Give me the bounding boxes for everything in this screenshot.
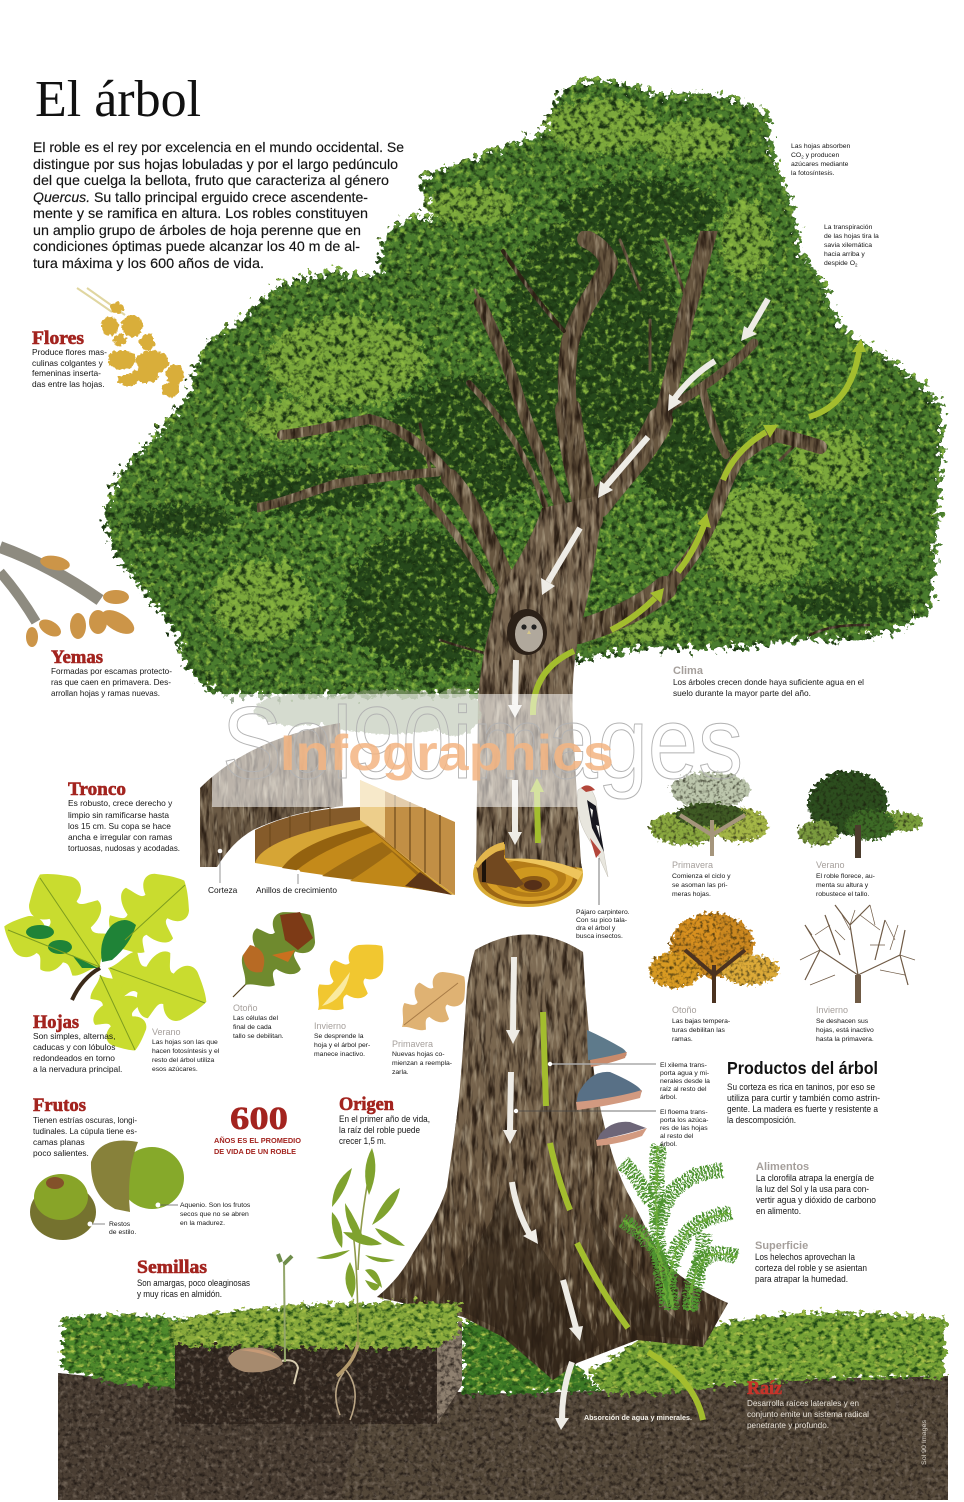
section: Origen: Origen <box>339 1094 394 1115</box>
section: Clima: Clima <box>673 665 704 677</box>
labels: bark and growth rings <box>208 849 337 895</box>
intro text: El roble es el rey por excelencia en el mundo occidental. Se <box>33 140 404 155</box>
leaf text: primavera: mienzan a reempla- <box>392 1060 452 1067</box>
text: floema: porta los azúca- <box>660 1117 708 1124</box>
illustration: catkin flowers <box>77 288 184 397</box>
intro text <box>33 140 404 271</box>
season text: verano tree: robustece el tallo. <box>816 891 869 898</box>
section: Tronco: limpio sin ramificarse hasta <box>68 810 169 820</box>
season text: invierno tree: Invierno <box>816 1005 848 1015</box>
text: xilema <box>660 1062 710 1101</box>
text: xilema: El xilema trans- <box>660 1062 707 1069</box>
section: Flores: femeninas inserta- <box>32 368 101 378</box>
section: Tronco <box>68 779 180 853</box>
section: Superficie: Los helechos aprovechan la <box>755 1252 855 1262</box>
illustration: bracket fungi <box>576 1030 647 1146</box>
season text: verano tree <box>816 860 875 898</box>
section: Tronco: tortuosas, nudosas y acodadas. <box>68 843 180 853</box>
leaf text: verano <box>152 1027 220 1073</box>
acorn labels: de estilo. <box>109 1229 136 1236</box>
section: Tronco: los 15 cm. Su copa se hace <box>68 821 171 831</box>
section: Tronco: ancha e irregular con ramas <box>68 832 172 842</box>
leaf text: invierno: Se desprende la <box>314 1033 364 1040</box>
section: Flores: Produce flores mas- <box>32 347 107 357</box>
leaf text: invierno <box>314 1021 370 1058</box>
section: Tronco: Es robusto, crece derecho y <box>68 798 173 808</box>
text block: leaves absorb CO2 <box>791 143 851 177</box>
text block: transpiration: despide O <box>824 260 855 267</box>
section: Yemas: Yemas <box>51 647 103 668</box>
season text: primavera tree: se asoman las pri- <box>672 882 728 889</box>
section: Semillas: Semillas <box>137 1257 207 1278</box>
text block: transpiration <box>824 224 879 268</box>
woodpecker text: Pájaro carpintero. <box>576 909 630 916</box>
leaf text: verano: Las hojas son las que <box>152 1039 218 1046</box>
season text: otoño tree: Las bajas tempera- <box>672 1018 730 1025</box>
credit: Sol 90 Images <box>921 1419 928 1465</box>
icon: sprouting acorn <box>228 1347 298 1384</box>
section: Origen: En el primer año de vida, <box>339 1114 430 1124</box>
season tree: verano <box>798 771 923 858</box>
leaf text: primavera <box>392 1039 452 1076</box>
text block: transpiration: savia xilemática <box>824 242 872 249</box>
section: Alimentos: vertir agua y dióxido de carbono <box>756 1195 876 1205</box>
section: Productos del árbol: utiliza para curtir y también como astrin- <box>727 1093 880 1103</box>
watermark: Infographics: Infographics <box>280 725 614 781</box>
section: Raíz: penetrante y profundo. <box>747 1420 829 1430</box>
section: Clima: suelo durante la mayor parte del año. <box>673 688 811 698</box>
illustration: woodpecker <box>577 785 608 905</box>
woodpecker text <box>576 909 630 940</box>
section: Origen: crecer 1,5 m. <box>339 1136 386 1146</box>
acorn labels: en la madurez. <box>180 1220 225 1227</box>
section: Frutos: Tienen estrías oscuras, longi- <box>33 1115 137 1125</box>
label: water and mineral absorption: Absorción de agua y minerales. <box>584 1413 692 1422</box>
leaf text: otoño: tallo se debilitan. <box>233 1033 284 1040</box>
illustration: oak canopy <box>105 81 943 696</box>
text: floema: al resto del <box>660 1133 694 1140</box>
section: Hojas: redondeados en torno <box>33 1053 115 1063</box>
section: Raíz <box>747 1378 869 1430</box>
section: Yemas: ras que caen en primavera. Des- <box>51 677 171 687</box>
illustration: seedling soil block <box>170 1254 462 1424</box>
illustration: autumn leaf <box>223 894 332 1006</box>
section: Yemas: arrollan hojas y ramas nuevas. <box>51 688 160 698</box>
section: Origen: la raíz del roble puede <box>339 1125 420 1135</box>
labels: bark and growth rings: Anillos de crecimiento <box>256 885 337 895</box>
text block: leaves absorb CO2: Las hojas absorben <box>791 143 851 150</box>
text block: transpiration: 2 <box>855 262 858 268</box>
illustration: lower trunk with roots <box>377 934 728 1380</box>
intro text: condiciones óptimas puede alcanzar los 40 m de al- <box>33 239 360 254</box>
text block: transpiration: hacia arriba y <box>824 251 865 258</box>
labels: bark and growth rings: Corteza <box>208 885 238 895</box>
watermark band <box>212 694 652 807</box>
text block: leaves absorb CO2: la fotosíntesis. <box>791 170 835 177</box>
section: Clima: Los árboles crecen donde haya suficiente agua en el <box>673 677 864 687</box>
leaf text: invierno: manece inactivo. <box>314 1051 365 1058</box>
text block: leaves absorb CO2: 2 <box>801 154 804 160</box>
section: Frutos: camas planas <box>33 1137 85 1147</box>
season text: invierno tree: hojas, está inactivo <box>816 1027 874 1034</box>
leaf text: verano: esos azúcares. <box>152 1066 198 1073</box>
season text: invierno tree: Se deshacen sus <box>816 1018 869 1025</box>
section: Raíz: Raíz <box>747 1378 783 1399</box>
section: Flores <box>32 328 107 389</box>
section: Alimentos <box>756 1161 876 1216</box>
season text: primavera tree: Comienza el ciclo y <box>672 873 731 880</box>
section: Origen <box>339 1094 430 1146</box>
intro text: del que cuelga la bellota, fruto que caracteriza al género <box>33 173 389 188</box>
season text: otoño tree: ramas. <box>672 1036 693 1043</box>
woodpecker text: dra el árbol y <box>576 925 616 932</box>
intro text: mente y se ramifica en altura. Los robles constituyen <box>33 206 368 221</box>
intro text: un amplio grupo de árboles de hoja perenne que en <box>33 223 361 238</box>
section: Productos del árbol <box>727 1058 880 1125</box>
section: Hojas: caducas y con lóbulos <box>33 1042 115 1052</box>
section: Frutos: tudinales. La cúpula tiene es- <box>33 1126 137 1136</box>
section: Yemas: Formadas por escamas protecto- <box>51 666 172 676</box>
text: xilema: raíz al resto del <box>660 1086 707 1093</box>
text: floema: res de las hojas <box>660 1125 708 1132</box>
season text: primavera tree <box>672 860 731 898</box>
section: Superficie: Superficie <box>755 1240 808 1252</box>
woodpecker text: busca insectos. <box>576 933 623 940</box>
section: Raíz: Desarrolla raíces laterales y en <box>747 1398 859 1408</box>
leaf text: primavera: Nuevas hojas co- <box>392 1051 445 1058</box>
season text: verano tree: Verano <box>816 860 845 870</box>
section: Tronco: Tronco <box>68 779 126 800</box>
diagram: green xylem arrows <box>530 339 866 1420</box>
section: Productos del árbol: la descomposición. <box>727 1115 796 1125</box>
season text: primavera tree: meras hojas. <box>672 891 711 898</box>
acorn labels: secos que no se abren <box>180 1211 249 1218</box>
leaf text: verano: Verano <box>152 1027 181 1037</box>
section: Frutos: poco salientes. <box>33 1148 89 1158</box>
section: Frutos <box>33 1095 137 1158</box>
intro text: distingue por sus hojas lobuladas y por el largo pedúnculo <box>33 157 398 172</box>
section: Hojas: a la nervadura principal. <box>33 1064 122 1074</box>
section: Alimentos: Alimentos <box>756 1161 809 1173</box>
season text: invierno tree <box>816 1005 874 1043</box>
leaf text: primavera: zarla. <box>392 1069 409 1076</box>
intro text: tura máxima y los 600 años de vida. <box>33 256 264 271</box>
season text: otoño tree: turas debilitan las <box>672 1027 725 1034</box>
illustration: fern <box>622 1145 737 1310</box>
illustration: yellow leaf <box>301 929 399 1027</box>
stat: 600 years: AÑOS ES EL PROMEDIO <box>214 1136 301 1145</box>
text: xilema: árbol. <box>660 1094 677 1101</box>
callout lines for xylem and phloem <box>514 1062 656 1113</box>
text: floema: El floema trans- <box>660 1109 708 1116</box>
text block: transpiration: La transpiración <box>824 224 873 231</box>
illustration: buds on twig <box>0 547 138 647</box>
section: Alimentos: la luz del Sol y la usa para con- <box>756 1184 869 1194</box>
acorn labels: Restos <box>109 1221 131 1228</box>
section: Flores: Flores <box>32 328 84 349</box>
illustration: faded tree behind watermark <box>255 688 480 736</box>
season tree: otoño <box>649 913 779 1003</box>
section: Hojas: Hojas <box>33 1012 79 1033</box>
illustration: soil and grass ground <box>58 1312 948 1500</box>
leaf text: otoño <box>233 1003 284 1040</box>
section: Superficie: corteza del roble y se asientan <box>755 1263 867 1273</box>
text: floema: árbol. <box>660 1141 677 1148</box>
section: Frutos: Frutos <box>33 1095 86 1116</box>
season text: otoño tree: Otoño <box>672 1005 697 1015</box>
illustration: beige leaf <box>387 958 479 1045</box>
leaf text: otoño: final de cada <box>233 1024 272 1031</box>
leaf text: otoño: Las células del <box>233 1015 278 1022</box>
watermark: Sol90images: Sol90images <box>222 686 743 800</box>
text: xilema: porta agua y mi- <box>660 1070 709 1077</box>
season text: primavera tree: Primavera <box>672 860 713 870</box>
stat: 600 years: 600 <box>230 1101 288 1137</box>
leaf text: primavera: Primavera <box>392 1039 433 1049</box>
title: El árbol <box>35 71 201 128</box>
section: Productos del árbol: Productos del árbol <box>727 1058 878 1078</box>
section: Hojas: Son simples, alternas, <box>33 1031 115 1041</box>
season tree: primavera <box>650 772 768 856</box>
text: floema <box>660 1109 708 1148</box>
section: Hojas <box>33 1012 122 1074</box>
illustration: wood block with bark and growth rings <box>200 723 455 895</box>
stat: 600 years: DE VIDA DE UN ROBLE <box>214 1147 296 1156</box>
illustration: acorns <box>30 1141 184 1240</box>
section: Productos del árbol: Su corteza es rica en taninos, por eso se <box>727 1082 875 1092</box>
illustration: sapling <box>316 1148 405 1345</box>
season text: otoño tree <box>672 1005 730 1043</box>
illustration: upper trunk with hollow <box>476 495 603 880</box>
season tree: invierno <box>800 905 915 1003</box>
section: Semillas: Son amargas, poco oleaginosas <box>137 1278 250 1288</box>
section: Raíz: conjunto emite un sistema radical <box>747 1409 869 1419</box>
section: Clima <box>673 665 864 698</box>
section: Alimentos: en alimento. <box>756 1206 801 1216</box>
season text: verano tree: menta su altura y <box>816 882 869 889</box>
intro text: Quercus. Su tallo principal erguido crece ascendente- <box>33 190 368 205</box>
text: xilema: nerales desde la <box>660 1078 710 1085</box>
section: Superficie <box>755 1240 867 1284</box>
section: Productos del árbol: gente. La madera es fuerte y resistente a <box>727 1104 878 1114</box>
leaf text: verano: hacen fotosíntesis y el <box>152 1048 220 1055</box>
leaf text: invierno: Invierno <box>314 1021 346 1031</box>
section: Semillas: y muy ricas en almidón. <box>137 1289 222 1299</box>
illustration: tree branches <box>257 231 870 660</box>
woodpecker text: Con su pico tala- <box>576 917 627 924</box>
season text: invierno tree: hasta la primavera. <box>816 1036 874 1043</box>
acorn labels: Aquenio. Son los frutos <box>180 1202 251 1209</box>
section: Yemas <box>51 647 172 698</box>
stat: 600 years <box>214 1101 301 1156</box>
leaf text: invierno: hoja y el árbol per- <box>314 1042 370 1049</box>
text block: leaves absorb CO2: CO <box>791 152 801 159</box>
leaf text: verano: resto del árbol utiliza <box>152 1057 215 1064</box>
section: Superficie: para atrapar la humedad. <box>755 1274 848 1284</box>
section: Flores: culinas colgantes y <box>32 358 104 368</box>
diagram: white phloem arrows <box>503 299 768 1430</box>
section: Semillas <box>137 1257 250 1299</box>
section: Flores: das entre las hojas. <box>32 379 105 389</box>
section: Alimentos: La clorofila atrapa la energía de <box>756 1173 874 1183</box>
text block: leaves absorb CO2: y producen <box>804 152 839 159</box>
text block: transpiration: de las hojas tira la <box>824 233 879 240</box>
acorn labels <box>109 1202 251 1236</box>
text block: leaves absorb CO2: azúcares mediante <box>791 161 849 168</box>
season text: verano tree: El roble florece, au- <box>816 873 875 880</box>
illustration: trunk cross-section ring <box>473 838 583 907</box>
icon: owl in hollow <box>507 609 547 655</box>
leaf text: otoño: Otoño <box>233 1003 258 1013</box>
illustration: big oak leaf <box>0 855 218 1061</box>
